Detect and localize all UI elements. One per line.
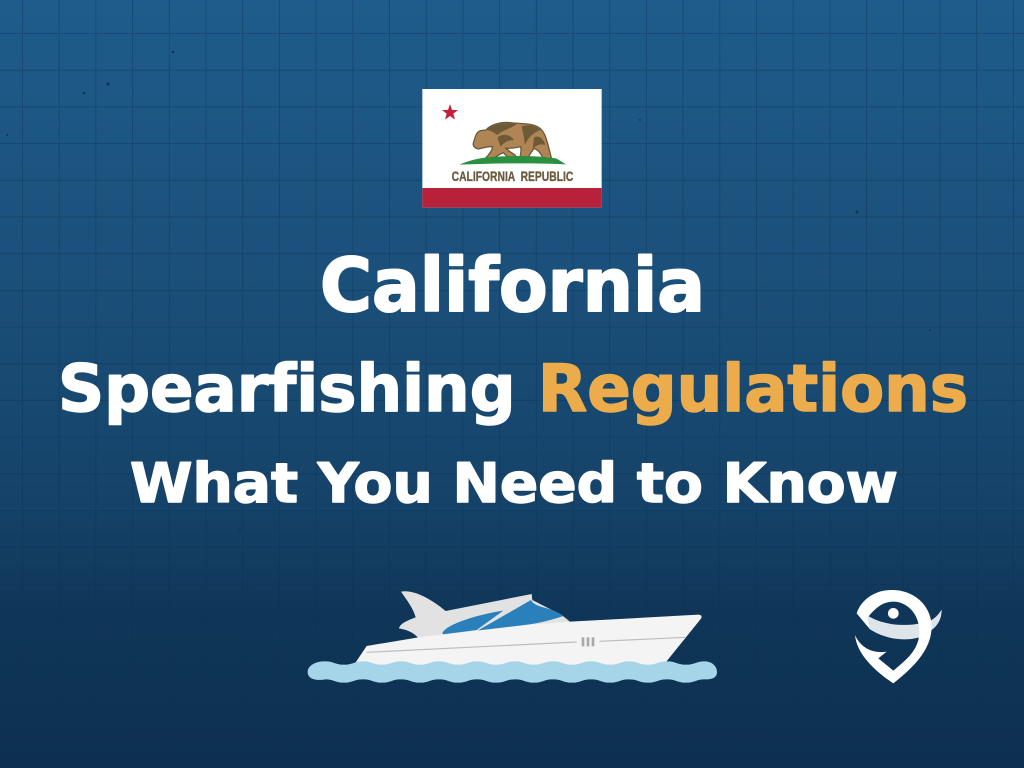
icon: bear on grass <box>459 122 566 165</box>
heading: California: California <box>320 243 705 329</box>
logo band and tail <box>868 609 942 639</box>
logo body <box>855 590 932 683</box>
heading: Spearfishing Regulations: Spearfishing Regulations <box>58 352 968 427</box>
subheading: What You Need to Know: What You Need to Know <box>130 452 898 515</box>
icon: red star <box>442 104 458 120</box>
yacht windows <box>442 600 563 634</box>
icon: motor yacht on water <box>308 591 717 683</box>
title block <box>58 243 968 515</box>
flag text: CALIFORNIA REPUBLIC <box>452 168 573 184</box>
yacht hull <box>352 615 702 667</box>
hull stripe and vents <box>367 637 685 652</box>
water waves <box>308 661 717 683</box>
California flag <box>422 89 602 208</box>
logo eye <box>888 608 899 619</box>
icon: fish logo <box>855 590 942 683</box>
yacht cabin <box>399 591 570 638</box>
